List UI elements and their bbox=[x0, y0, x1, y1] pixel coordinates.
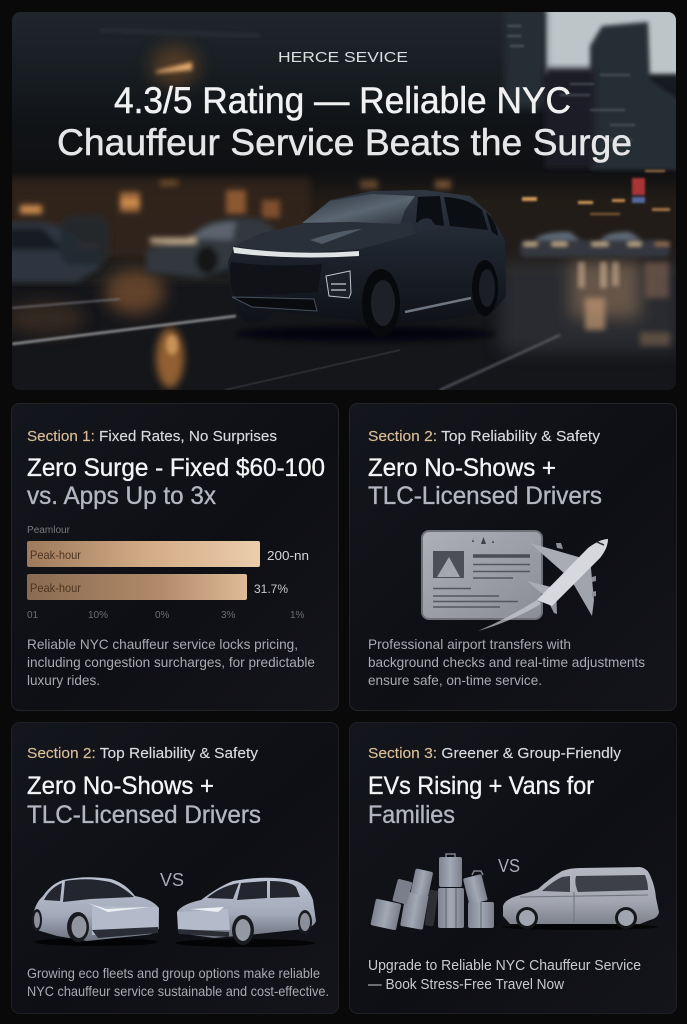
body text bbox=[27, 636, 315, 688]
hero: blurred sky and skyline bbox=[100, 8, 680, 170]
section label 1: Section 1: Fixed Rates, No Surprises bbox=[27, 428, 277, 445]
van windows bbox=[542, 875, 648, 892]
icon: silver van bbox=[502, 867, 659, 930]
call to action text: Upgrade to Reliable NYC Chauffeur Service bbox=[368, 957, 641, 974]
body text: luxury rides. bbox=[27, 672, 100, 688]
hero panel: rainy city street with black SUV bbox=[5, 8, 680, 390]
call to action text bbox=[368, 957, 641, 993]
body text: background checks and real-time adjustments bbox=[368, 654, 645, 670]
SUV hood highlight bbox=[310, 229, 362, 244]
vs label: VS bbox=[160, 870, 184, 890]
body text: Professional airport transfers with bbox=[368, 636, 571, 652]
left EV windows bbox=[44, 879, 134, 902]
section label 2: Section 2: Top Reliability & Safety bbox=[368, 428, 601, 445]
axis labels bbox=[27, 610, 305, 621]
bar: first: Peak-hour bbox=[30, 548, 81, 562]
left EV front fascia bbox=[92, 906, 158, 935]
right EV front wheel bbox=[232, 915, 254, 945]
icon: silver EV left bbox=[32, 877, 159, 946]
bar chart bbox=[27, 525, 309, 621]
SUV front wheel bbox=[362, 269, 400, 330]
heading bbox=[27, 454, 325, 510]
bar: first: 200-nn bbox=[267, 548, 309, 563]
heading: Families bbox=[368, 801, 455, 829]
body text: Reliable NYC chauffeur service locks pricing, bbox=[27, 636, 298, 652]
axis labels: 0% bbox=[155, 610, 170, 621]
vs label: VS bbox=[498, 856, 520, 876]
section label: Section 2: Top Reliability & Safety bbox=[27, 745, 259, 762]
call to action text: — Book Stress-Free Travel Now bbox=[368, 976, 564, 993]
heading: vs. Apps Up to 3x bbox=[27, 482, 216, 510]
panel: greener and group friendly bbox=[350, 722, 676, 1014]
axis labels: 1% bbox=[290, 610, 305, 621]
axis labels: 3% bbox=[221, 610, 236, 621]
hero title bbox=[57, 80, 632, 163]
panel: fixed rates bbox=[12, 404, 338, 710]
icon: silver EV right bbox=[175, 878, 316, 947]
SUV mirror bbox=[418, 218, 435, 225]
van front wheel bbox=[516, 907, 538, 929]
heading: EVs Rising + Vans for bbox=[368, 772, 594, 800]
icon: luggage pile bbox=[370, 854, 494, 930]
left EV rear wheel bbox=[32, 909, 42, 931]
SUV hood bbox=[235, 228, 406, 252]
SUV headlamp bbox=[326, 271, 351, 298]
bar: second: Peak-hour bbox=[30, 581, 81, 595]
heading: Zero Surge - Fixed $60-100 bbox=[27, 454, 325, 482]
heading bbox=[27, 772, 261, 829]
right EV lower grille bbox=[177, 929, 229, 937]
hero: black SUV bbox=[228, 190, 506, 342]
left EV headlight bbox=[88, 903, 150, 912]
heading: Zero No-Shows + bbox=[27, 772, 214, 800]
right EV front fascia bbox=[177, 909, 230, 930]
right EV windows bbox=[207, 881, 300, 900]
axis labels: 10% bbox=[88, 610, 108, 621]
SUV windshield bbox=[302, 194, 415, 224]
panel: eco fleets comparison bbox=[12, 722, 338, 1014]
bar: first bbox=[27, 541, 309, 567]
hero: blurred traffic bbox=[8, 215, 670, 282]
body text bbox=[27, 965, 329, 999]
body text: including congestion surcharges, for predictable bbox=[27, 654, 315, 670]
right EV headlight bbox=[190, 907, 224, 912]
bar: second: 31.7% bbox=[254, 582, 288, 596]
hero: wet road bbox=[5, 262, 680, 390]
hero eyebrow: HERCE SEVICE bbox=[278, 49, 408, 66]
panel: reliability and safety bbox=[350, 404, 676, 710]
bar: second bbox=[27, 574, 288, 600]
bar chart: Peamlour bbox=[27, 525, 71, 536]
left EV lower grille bbox=[92, 927, 158, 938]
body text bbox=[368, 636, 645, 688]
hero title: 4.3/5 Rating — Reliable NYC bbox=[114, 80, 571, 121]
body text: Growing eco fleets and group options make reliable bbox=[27, 965, 320, 981]
SUV rear wheel bbox=[472, 260, 498, 316]
left EV front wheel bbox=[67, 912, 89, 942]
SUV side sill bbox=[405, 298, 471, 312]
van rear wheel bbox=[615, 907, 637, 929]
heading: Zero No-Shows + bbox=[368, 454, 556, 482]
body text: NYC chauffeur service sustainable and cost-effective. bbox=[27, 983, 329, 999]
icon: airplane bbox=[478, 539, 608, 631]
SUV grille bbox=[230, 262, 322, 297]
heading bbox=[368, 454, 602, 510]
section label 3: Section 3: Greener & Group-Friendly bbox=[368, 745, 622, 762]
heading: TLC-Licensed Drivers bbox=[368, 482, 602, 510]
hero: blurred storefront lights bbox=[10, 170, 670, 258]
van body line bbox=[520, 892, 648, 922]
right EV rear wheel bbox=[298, 910, 312, 934]
SUV lower bumper bbox=[232, 297, 317, 311]
heading bbox=[368, 772, 594, 829]
axis labels: 01 bbox=[27, 610, 39, 621]
SUV side windows bbox=[416, 196, 498, 236]
heading: TLC-Licensed Drivers bbox=[27, 801, 261, 829]
hero title: Chauffeur Service Beats the Surge bbox=[57, 122, 632, 163]
icon: licence card bbox=[422, 531, 542, 619]
SUV light strip bbox=[233, 247, 359, 257]
body text: ensure safe, on-time service. bbox=[368, 672, 542, 688]
